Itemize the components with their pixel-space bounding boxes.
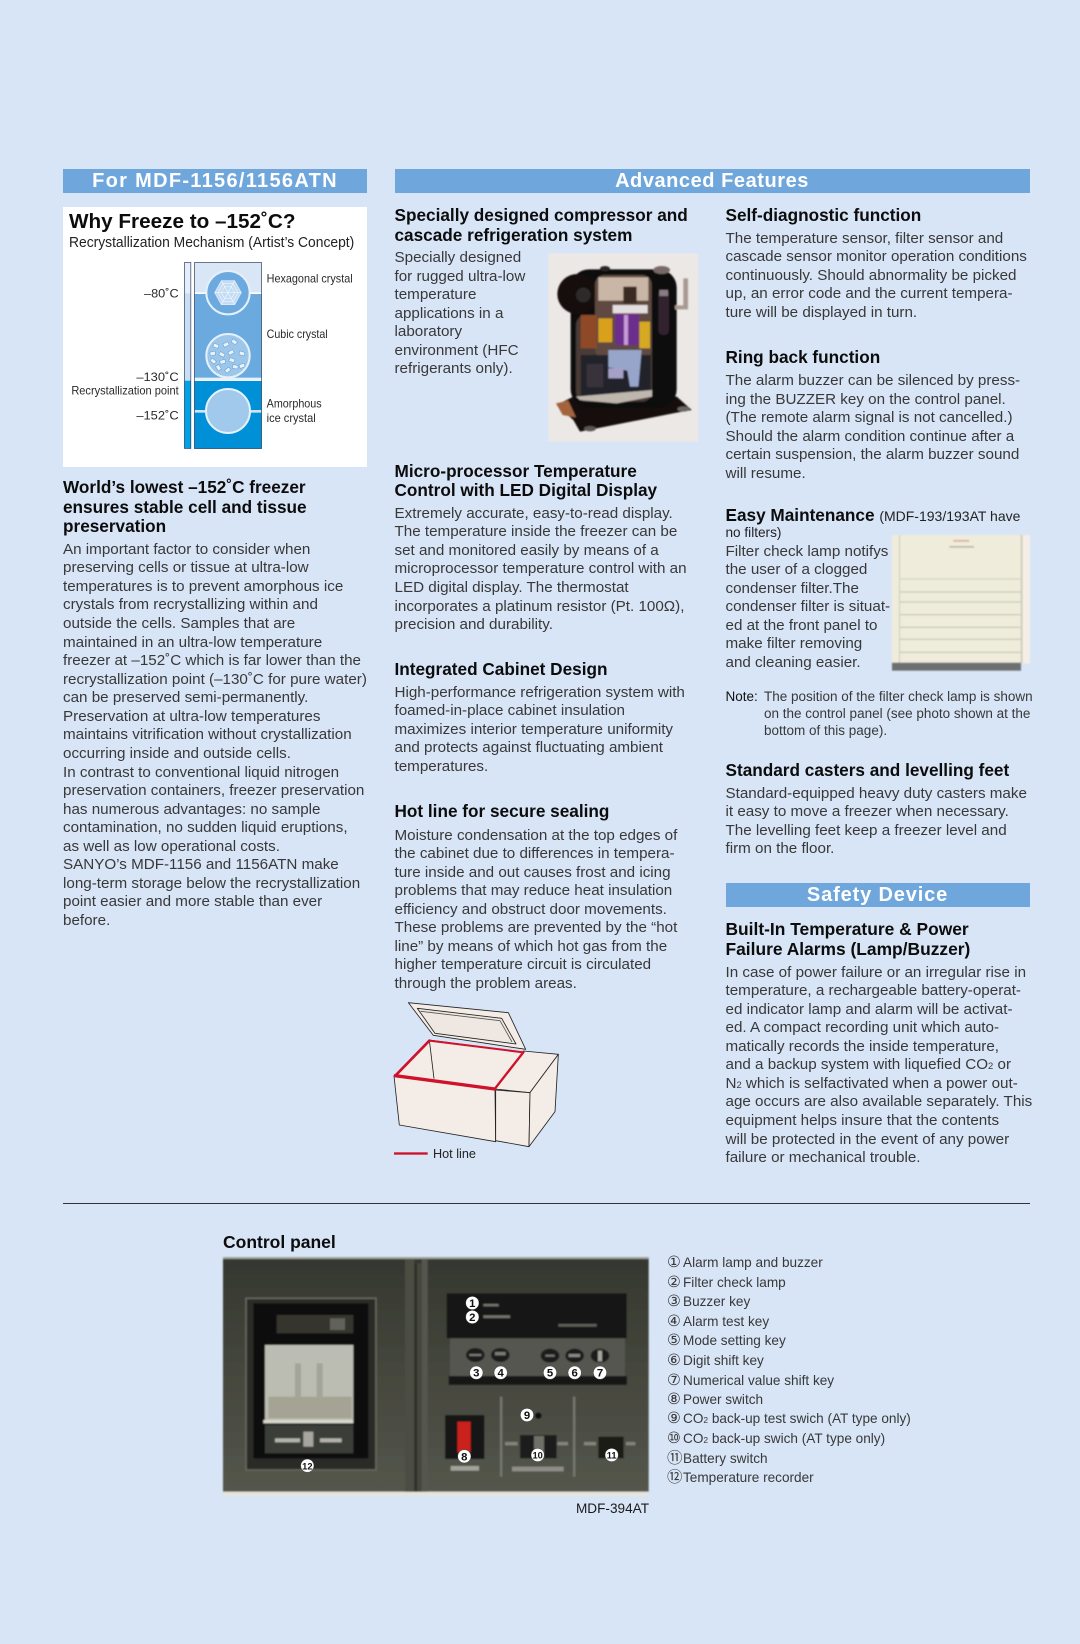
legend: hot line — [394, 1147, 476, 1161]
item 9: ⑨ — [667, 1409, 680, 1427]
panel title: Why Freeze to –152˚C? — [69, 210, 295, 233]
item 6 — [667, 1351, 764, 1369]
item 10: ⑩ — [667, 1429, 680, 1447]
text block: integrated cabinet: and protects against fluctuating ambient — [394, 739, 663, 756]
co2 switch — [535, 1412, 542, 1419]
item 8: Power switch — [683, 1392, 763, 1407]
text: The position of the filter check lamp is shown — [764, 688, 1033, 704]
header bar: Advanced Features: Advanced Features — [615, 170, 809, 192]
number markers — [301, 1296, 618, 1472]
text block: integrated cabinet: maximizes interior temperature uniformity — [394, 721, 673, 738]
text block: alarms: ed. A compact recording unit which auto- — [726, 1019, 999, 1036]
icon: amorphous ice crystal — [206, 389, 250, 433]
shell — [571, 269, 677, 408]
heading: self-diagnostic: Self-diagnostic function — [726, 205, 921, 225]
icon: hexagonal crystal — [206, 271, 250, 314]
item 6: Digit shift key — [683, 1353, 764, 1368]
text block: alarms: N2 which is selfactivated when a power out- — [726, 1075, 1018, 1092]
power — [445, 1415, 484, 1459]
icon: cubic crystal — [206, 334, 250, 377]
text block: easy maintenance: ed at the front panel to — [726, 617, 878, 634]
base and feet — [557, 397, 692, 432]
diagram: recrystallization mechanism — [71, 262, 353, 449]
heading: alarms — [726, 919, 970, 959]
text block: alarms — [726, 964, 1032, 1166]
crystal state column — [194, 262, 262, 449]
item 9: CO2 back-up test swich (AT type only) — [683, 1411, 911, 1426]
text block: easy maintenance: condenser filter.The — [726, 580, 859, 597]
item 12: Temperature recorder — [683, 1470, 814, 1485]
text block: freezer explanation: In contrast to conventional liquid nitrogen — [63, 764, 339, 781]
heading: easy maintenance: Easy Maintenance (MDF-193/193AT have — [726, 504, 1020, 524]
photo: control panel: 2 — [469, 1312, 475, 1324]
item 1: ① — [667, 1253, 680, 1271]
heading: compressor: Specially designed compressor and — [394, 205, 688, 225]
text block: micro-processor — [394, 505, 687, 633]
heading: compressor: cascade refrigeration system — [394, 225, 632, 245]
display — [447, 1293, 627, 1338]
heading: alarms: Failure Alarms (Lamp/Buzzer) — [726, 939, 970, 959]
hot line red outline — [395, 1041, 523, 1089]
text block: alarms: In case of power failure or an irregular rise in — [726, 964, 1026, 980]
text block: micro-processor: incorporates a platinum resistor (Pt. 100Ω), — [394, 598, 684, 615]
photo: control panel: 5 — [547, 1368, 553, 1380]
heading: ring back: Ring back function — [726, 347, 880, 367]
legend: hot line: Hot line — [433, 1147, 476, 1161]
temperature labels: Recrystallization point — [71, 385, 179, 398]
text block: micro-processor: Extremely accurate, easy-to-read display. — [394, 505, 673, 522]
item 5: ⑤ — [667, 1331, 680, 1349]
item 7: Numerical value shift key — [683, 1373, 834, 1388]
photo: control panel: 6 — [572, 1368, 578, 1380]
text block: alarms: matically records the inside temperature, — [726, 1038, 999, 1055]
text block: hot line: ture inside and out causes frost and icing — [394, 864, 671, 881]
heading: micro-processor: Micro-processor Temperature — [394, 461, 637, 481]
temperature labels: –80˚C — [144, 287, 179, 301]
photo: control panel: 1 — [469, 1298, 475, 1310]
text block: ring back: The alarm buzzer can be silenced by press- — [726, 372, 1020, 389]
header bar: Advanced Features — [394, 169, 1030, 193]
text block: ring back — [726, 372, 1020, 482]
text block: alarms: will be protected in the event of any power — [726, 1131, 1009, 1148]
header bar: Safety Device — [726, 883, 1030, 907]
text block: freezer explanation: freezer at –152˚C which is far lower than the — [63, 652, 361, 669]
item 8: ⑧ — [667, 1390, 680, 1408]
text block: freezer explanation: preserving cells or tissue at ultra-low — [63, 559, 309, 576]
text block: freezer explanation: Preservation at ultra-low temperatures — [63, 708, 320, 725]
text block: alarms: age occurs are also available separately. This — [726, 1093, 1032, 1110]
text block: hot line: through the problem areas. — [394, 975, 577, 992]
text block: hot line: the cabinet due to differences in tempera- — [394, 845, 675, 862]
item 5: Mode setting key — [683, 1333, 786, 1348]
crystal labels: Hexagonal crystal — [267, 272, 353, 286]
battery switch — [598, 1437, 624, 1458]
photo: control panel: 9 — [524, 1410, 530, 1422]
heading: world's lowest freezer — [63, 477, 307, 536]
item 11: Battery switch — [683, 1451, 768, 1466]
text block: self-diagnostic — [726, 230, 1027, 321]
text block: integrated cabinet: foamed-in-place cabinet insulation — [394, 702, 625, 719]
text block: easy maintenance: make filter removing — [726, 635, 862, 652]
heading: world's lowest freezer: ensures stable cell and tissue — [63, 497, 307, 517]
text block: self-diagnostic: cascade sensor monitor operation conditions — [726, 248, 1027, 265]
text block: freezer explanation: maintains vitrification without crystallization — [63, 726, 352, 743]
text block: micro-processor: microprocessor temperature control with an — [394, 560, 687, 577]
text block: freezer explanation: long-term storage below the recrystallization — [63, 875, 360, 892]
note: filter check lamp — [726, 688, 1033, 738]
text block: casters: firm on the floor. — [726, 840, 834, 857]
text block: alarms: ed indicator lamp and alarm will be activat- — [726, 1001, 1013, 1018]
text block: ring back: Should the alarm condition continue after a — [726, 428, 1014, 445]
text block: self-diagnostic: up, an error code and the current tempera- — [726, 285, 1013, 302]
text block: easy maintenance — [726, 542, 890, 671]
text: bottom of this page). — [764, 722, 887, 738]
pipe — [675, 278, 688, 309]
text block: freezer explanation: occurring inside and outside cells. — [63, 745, 291, 762]
item 2: ② — [667, 1273, 680, 1291]
heading: micro-processor: Control with LED Digital Display — [394, 480, 657, 500]
text block: integrated cabinet: High-performance refrigeration system with — [394, 684, 685, 700]
text block: hot line: higher temperature circuit is circulated — [394, 956, 651, 973]
text block: hot line: efficiency and obstruct door movements. — [394, 901, 667, 918]
text block: alarms: failure or mechanical trouble. — [726, 1149, 921, 1166]
text block: freezer explanation: can be preserved semi-permanently. — [63, 689, 308, 706]
heading: integrated cabinet: Integrated Cabinet Design — [394, 659, 607, 679]
photo: control panel: 7 — [597, 1368, 603, 1380]
text block: ring back: will resume. — [726, 465, 806, 482]
text block: alarms: equipment helps insure that the contents — [726, 1112, 999, 1129]
temperature labels — [71, 287, 179, 422]
heading: hot line: Hot line for secure sealing — [394, 801, 609, 821]
item 7: ⑦ — [667, 1371, 680, 1389]
photo: control panel: 8 — [461, 1451, 467, 1463]
text block: freezer explanation: recrystallization point (–130˚C for pure water) — [63, 671, 367, 688]
item 10: CO2 back-up swich (AT type only) — [683, 1431, 885, 1446]
item 3: Buzzer key — [683, 1294, 750, 1309]
crystal labels: ice crystal — [267, 411, 316, 425]
text block: micro-processor: LED digital display. The thermostat — [394, 579, 629, 596]
photo: control panel: 10 — [532, 1451, 543, 1461]
text block: freezer explanation — [63, 541, 367, 929]
item 3: ③ — [667, 1292, 680, 1310]
item 11: ⑪ — [667, 1449, 682, 1467]
text block: self-diagnostic: continuously. Should abnormality be picked — [726, 267, 1016, 284]
text block: alarms: temperature, a rechargeable battery-operat- — [726, 982, 1021, 999]
panel: why freeze to -152C — [63, 207, 367, 467]
window — [576, 315, 652, 402]
text block: compressor: environment (HFC — [394, 342, 519, 359]
crystal labels — [267, 272, 353, 425]
text block: freezer explanation: An important factor to consider when — [63, 541, 310, 558]
text block: micro-processor: set and monitored easily by means of a — [394, 542, 659, 559]
heading: alarms: Built-In Temperature & Power — [726, 919, 969, 939]
header bar: Safety Device: Safety Device — [807, 884, 948, 906]
heading: control panel: Control panel — [223, 1232, 336, 1252]
panel subtitle: Recrystallization Mechanism (Artist’s Concept) — [69, 235, 354, 251]
text: on the control panel (see photo shown at the — [764, 706, 1030, 720]
photo: filter front panel — [891, 534, 1030, 672]
text block: freezer explanation: point easier and more stable than ever — [63, 893, 322, 910]
text block: freezer explanation: temperatures is to prevent amorphous ice — [63, 578, 343, 595]
text block: freezer explanation: as well as low operational costs. — [63, 838, 280, 855]
text block: compressor: Specially designed — [394, 249, 521, 266]
text block: hot line — [394, 826, 678, 992]
heading: compressor — [394, 205, 688, 245]
temperature bar — [184, 262, 191, 448]
text block: hot line: These problems are prevented by the “hot — [394, 919, 677, 936]
photo: control panel: 4 — [498, 1368, 505, 1380]
text block: ring back: (The remote alarm signal is not cancelled.) — [726, 409, 1012, 426]
text block: casters: The levelling feet keep a freezer level and — [726, 822, 1007, 839]
text block: ring back: certain suspension, the alarm buzzer sound — [726, 446, 1019, 463]
text block: micro-processor: precision and durability. — [394, 616, 553, 633]
text block: compressor: laboratory — [394, 323, 462, 340]
item 4: Alarm test key — [683, 1314, 769, 1329]
item 2: Filter check lamp — [683, 1275, 786, 1290]
crystal labels: Amorphous — [267, 397, 322, 411]
text block: casters: it easy to move a freezer when necessary. — [726, 803, 1009, 820]
temperature labels: –130˚C — [136, 370, 179, 384]
diagram: chest freezer with hot line — [394, 1002, 559, 1161]
heading: world's lowest freezer: World’s lowest –152˚C freezer — [63, 477, 306, 497]
text block: compressor — [394, 249, 526, 377]
item 12: ⑫ — [667, 1468, 682, 1486]
text block: compressor: for rugged ultra-low — [394, 268, 525, 285]
heading continuation: no filters: no filters) — [726, 525, 781, 540]
item 1: Alarm lamp and buzzer — [683, 1255, 823, 1270]
caption: model: MDF-394AT — [576, 1501, 649, 1516]
text block: hot line: problems that may reduce heat insulation — [394, 882, 672, 899]
text block: compressor: refrigerants only). — [394, 360, 513, 377]
text block: freezer explanation: maintained in an ultra-low temperature — [63, 634, 322, 651]
heading: world's lowest freezer: preservation — [63, 516, 166, 536]
photo: compressor — [548, 254, 698, 442]
header bar: For MDF-1156/1156ATN: For MDF-1156/1156ATN — [92, 170, 338, 192]
text block: casters — [726, 784, 1027, 857]
text block: integrated cabinet: temperatures. — [394, 758, 488, 775]
item 6: ⑥ — [667, 1351, 680, 1369]
photo: control panel: 11 — [607, 1451, 617, 1461]
heading: micro-processor — [394, 461, 657, 500]
text block: freezer explanation: preservation containers, freezer preservation — [63, 782, 364, 799]
crystal labels: Cubic crystal — [267, 327, 328, 341]
text block: freezer explanation: has numerous advantages: no sample — [63, 801, 321, 818]
text block: self-diagnostic: The temperature sensor, filter sensor and — [726, 230, 1003, 246]
legend: control panel key — [667, 1253, 911, 1486]
text block: hot line: Moisture condensation at the top edges of — [394, 826, 677, 844]
text block: ring back: ing the BUZZER key on the control panel. — [726, 391, 1006, 408]
temperature labels: –152˚C — [136, 408, 179, 422]
note: filter check lamp: Note: — [726, 688, 758, 704]
text block: freezer explanation: before. — [63, 912, 110, 929]
text block: self-diagnostic: ture will be displayed in turn. — [726, 304, 917, 321]
text block: freezer explanation: crystals from recrystallizing within and — [63, 596, 318, 613]
text block: easy maintenance: condenser filter is situat- — [726, 598, 890, 615]
text block: freezer explanation: SANYO’s MDF-1156 and 1156ATN make — [63, 856, 339, 873]
photo: control panel: 12 — [302, 1461, 313, 1471]
text block: casters: Standard-equipped heavy duty casters make — [726, 784, 1027, 802]
text block: alarms: and a backup system with liquefied CO2 or — [726, 1056, 1011, 1073]
text block: compressor: temperature — [394, 286, 476, 303]
item 3 — [667, 1292, 750, 1310]
text block: freezer explanation: outside the cells. Samples that are — [63, 615, 295, 632]
text block: easy maintenance: Filter check lamp notifys — [726, 542, 888, 560]
item 4: ④ — [667, 1312, 680, 1330]
item 8 — [667, 1390, 763, 1408]
heading: casters: Standard casters and levelling feet — [726, 760, 1009, 780]
text block: micro-processor: The temperature inside the freezer can be — [394, 523, 677, 540]
photo: control panel — [222, 1256, 650, 1497]
recorder — [246, 1298, 376, 1470]
text block: hot line: line” by means of which hot gas from the — [394, 938, 667, 955]
text block: easy maintenance: and cleaning easier. — [726, 654, 861, 671]
text block: integrated cabinet — [394, 684, 685, 775]
text block: easy maintenance: the user of a clogged — [726, 561, 867, 578]
text block: freezer explanation: contamination, no sudden liquid eruptions, — [63, 819, 348, 836]
text block: compressor: applications in a — [394, 305, 503, 322]
photo: control panel: 3 — [473, 1368, 479, 1380]
